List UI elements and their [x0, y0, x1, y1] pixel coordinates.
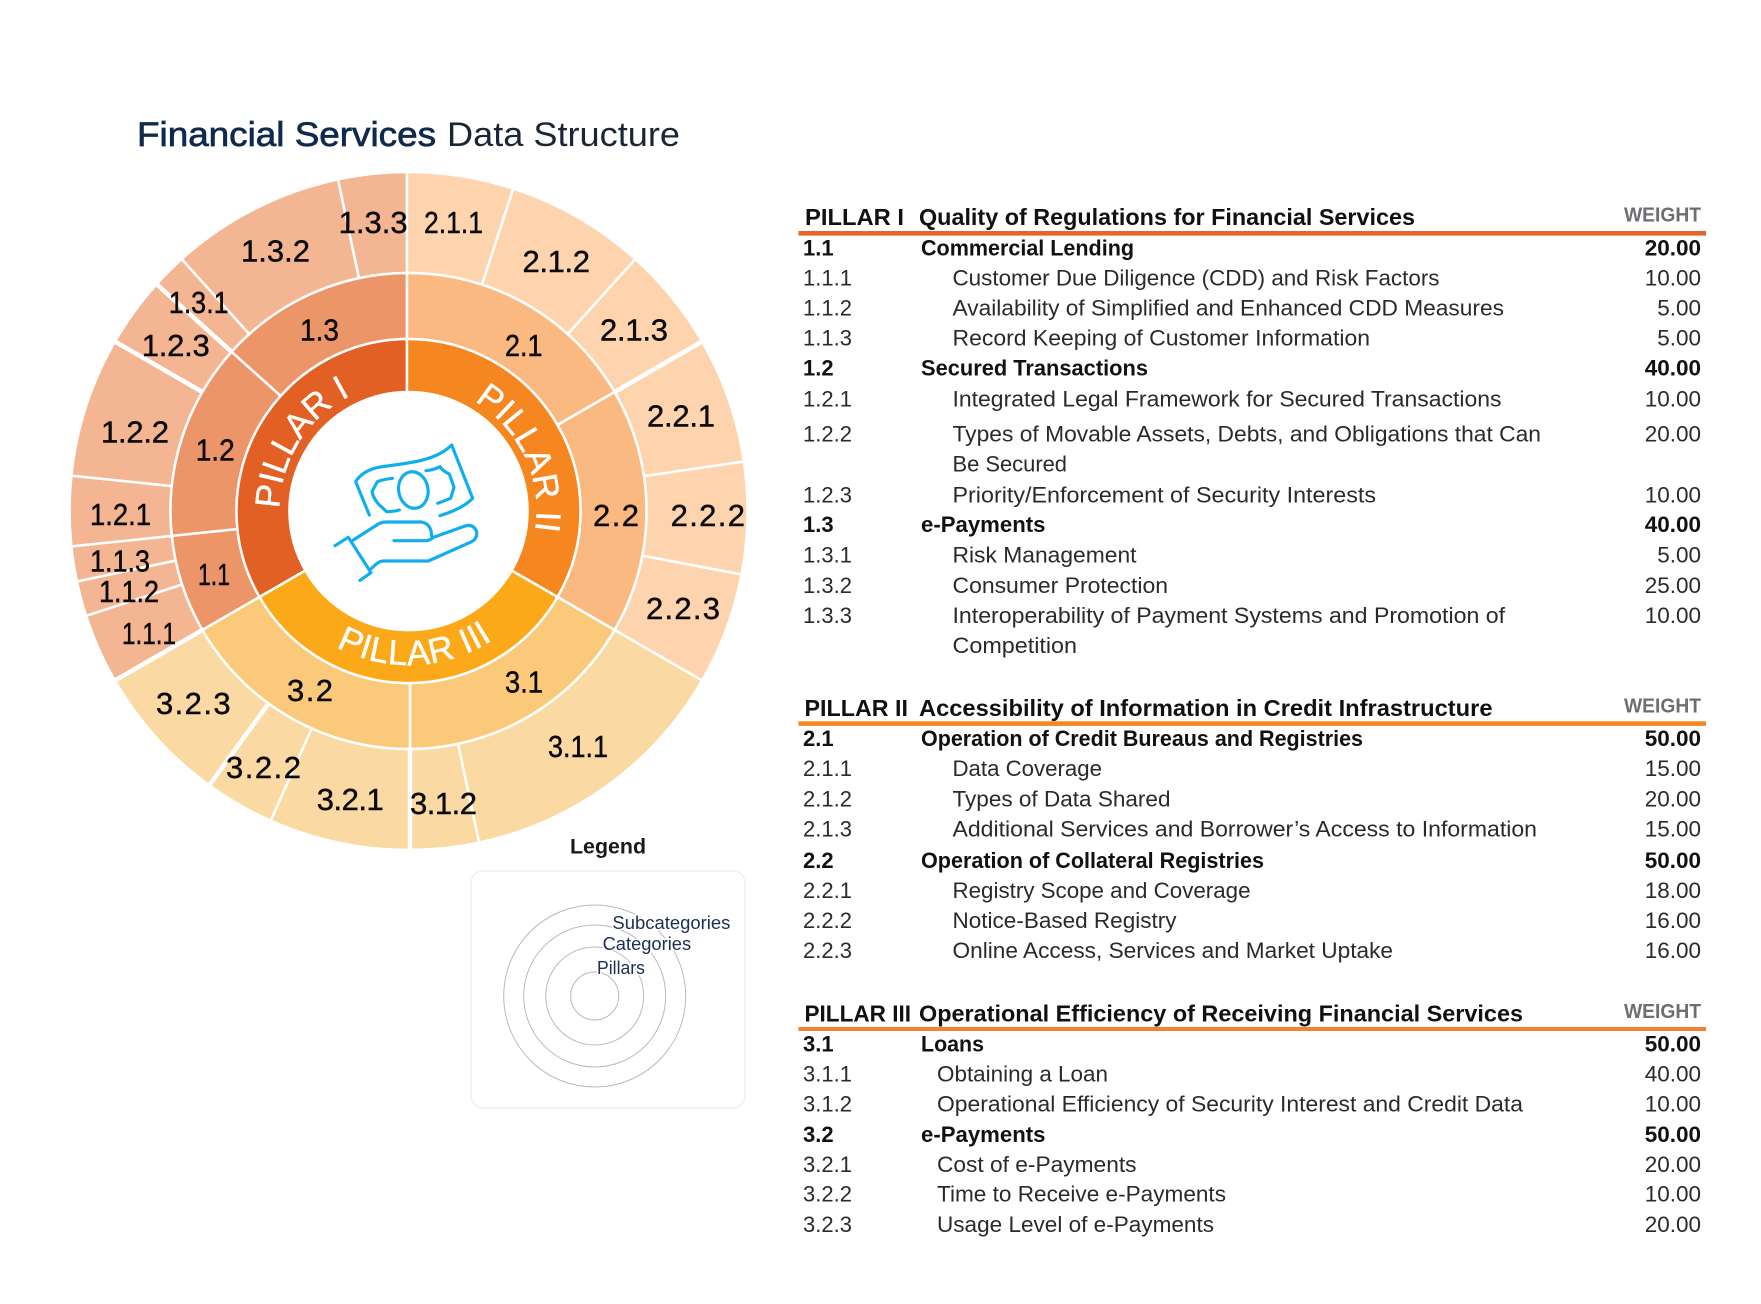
row 2.1.1: Data Coverage — [952, 756, 1102, 781]
segment 2.2.3 — [615, 556, 742, 680]
segment pillar II — [407, 339, 581, 597]
ring: subcategories — [70, 172, 748, 850]
row 2.2.1: 2.2.1 — [803, 878, 852, 903]
row 1.1.2: Availability of Simplified and Enhanced CDD Measures — [952, 296, 1504, 321]
segment 1.3.3 — [338, 172, 407, 278]
row 2.1 — [803, 726, 1701, 751]
row 1.3.3 — [803, 603, 1701, 658]
row 1.2.2: Types of Movable Assets, Debts, and Obligations that Can — [952, 422, 1541, 447]
row 2.2.2: 16.00 — [1645, 908, 1701, 933]
row 2.2: Operation of Collateral Registries — [921, 848, 1264, 873]
row 2.2.3 — [803, 938, 1701, 963]
segment 1.2.1 — [70, 476, 172, 546]
row 1.3.3: 10.00 — [1645, 603, 1701, 628]
row 1.3.2: Consumer Protection — [952, 573, 1168, 598]
title: Data Structure — [447, 116, 680, 154]
row 2.1.2 — [803, 787, 1701, 812]
row 2.2.2 — [803, 908, 1701, 933]
label 1.1.1: 1.1.1 — [122, 616, 176, 651]
row 3.2 — [803, 1122, 1701, 1147]
label: PILLAR III: PILLAR III — [338, 620, 490, 666]
row 2.1.3: 15.00 — [1645, 817, 1701, 842]
row 3.2: 3.2 — [803, 1122, 834, 1147]
label 3.1.1: 3.1.1 — [548, 729, 608, 764]
label 1.1: 1.1 — [198, 557, 230, 592]
row 1.2: 40.00 — [1645, 356, 1701, 381]
row 1.2.2: Be Secured — [952, 452, 1067, 477]
row 1.3.1 — [803, 543, 1701, 568]
row 1.3: 1.3 — [803, 512, 834, 537]
row 3.1: 50.00 — [1645, 1032, 1701, 1057]
row 3.2.3: Usage Level of e-Payments — [937, 1212, 1214, 1237]
row 1.1.3 — [803, 326, 1701, 351]
table: pillar II — [798, 695, 1706, 963]
row 3.2.1: 20.00 — [1645, 1152, 1701, 1177]
row 3.1.2 — [803, 1092, 1701, 1117]
segment 1.1.2 — [77, 560, 182, 616]
heading: pillar I: PILLAR I — [805, 204, 904, 230]
row 1.1 — [803, 236, 1701, 261]
row 2.1: Operation of Credit Bureaus and Registries — [921, 726, 1363, 751]
row 1.1.2: 1.1.2 — [803, 296, 852, 321]
label 3.2.2: 3.2.2 — [226, 750, 301, 785]
row 2.2.3: Online Access, Services and Market Uptake — [952, 938, 1393, 963]
row 2.2: 50.00 — [1645, 848, 1701, 873]
row 3.2.1: 3.2.1 — [803, 1152, 852, 1177]
heading: pillar I — [798, 204, 1706, 236]
label: PILLAR II: PILLAR II — [476, 382, 561, 531]
row 3.1: 3.1 — [803, 1032, 834, 1057]
segment code labels — [90, 205, 745, 821]
row 1.3.3: 1.3.3 — [803, 603, 852, 628]
heading: pillar III — [798, 1001, 1706, 1031]
row 3.1.1: 40.00 — [1645, 1062, 1701, 1087]
row 2.1.2: Types of Data Shared — [952, 787, 1170, 812]
table: pillar III — [798, 1001, 1706, 1237]
row 1.1.2: 5.00 — [1657, 296, 1701, 321]
icon: hand holding banknote — [335, 445, 477, 580]
legend label: pillars: Pillars — [597, 958, 645, 978]
row 3.1: Loans — [921, 1032, 984, 1057]
row 1.1.1: 10.00 — [1645, 266, 1701, 291]
segment 1.2.2 — [71, 342, 202, 486]
legend concentric rings — [504, 905, 686, 1087]
row 3.2.1 — [803, 1152, 1701, 1177]
heading: pillar III: PILLAR III — [804, 1001, 911, 1027]
row 1.2.1 — [803, 387, 1701, 412]
row 2.2 — [803, 848, 1701, 873]
row 2.2.1 — [803, 878, 1701, 903]
row 3.1.1 — [803, 1062, 1701, 1087]
label 1.1.2: 1.1.2 — [99, 574, 159, 609]
label 2.2.1: 2.2.1 — [647, 399, 715, 434]
label 1.3: 1.3 — [300, 313, 339, 348]
label 1.3.1: 1.3.1 — [169, 285, 229, 320]
row 3.2.2: 10.00 — [1645, 1182, 1701, 1207]
row 1.3.1: 1.3.1 — [803, 543, 852, 568]
heading: pillar I: Quality of Regulations for Financial Services — [919, 204, 1415, 230]
heading: pillar II: Accessibility of Information in Credit Infrastructure — [919, 695, 1492, 721]
row 2.1.3: 2.1.3 — [803, 817, 852, 842]
heading: pillar III: WEIGHT — [1624, 1001, 1701, 1023]
segment 3.2 — [202, 597, 410, 749]
row 2.2.2: 2.2.2 — [803, 908, 852, 933]
label 2.1.1: 2.1.1 — [424, 205, 483, 240]
row 2.1: 2.1 — [803, 726, 834, 751]
label 3.1: 3.1 — [505, 665, 543, 700]
row 1.2 — [803, 356, 1701, 381]
row 3.2.3: 3.2.3 — [803, 1212, 852, 1237]
row 1.3: e-Payments — [921, 512, 1046, 537]
row 1.2.3: 10.00 — [1645, 482, 1701, 507]
heading: pillar III: Operational Efficiency of Receiving Financial Services — [919, 1001, 1523, 1027]
segment 1.3 — [232, 273, 407, 396]
heading: pillar II: PILLAR II — [804, 695, 908, 721]
label 1.3.2: 1.3.2 — [241, 234, 310, 269]
label: PILLAR I: PILLAR I — [255, 376, 348, 506]
label 2.1.3: 2.1.3 — [600, 313, 668, 348]
segment pillar III — [260, 570, 558, 683]
row 1.3.2: 25.00 — [1645, 573, 1701, 598]
row 1.2.2 — [803, 422, 1701, 477]
row 1.1.2 — [803, 296, 1701, 321]
label 1.2.3: 1.2.3 — [142, 328, 210, 363]
row 1.1: 20.00 — [1645, 236, 1701, 261]
legend — [471, 836, 745, 1108]
row 2.1.2: 20.00 — [1645, 787, 1701, 812]
row 1.3.1: Risk Management — [952, 543, 1136, 568]
legend title: Legend — [570, 836, 646, 858]
row 2.1.1: 2.1.1 — [803, 756, 852, 781]
row 1.3: 40.00 — [1645, 512, 1701, 537]
row 2.1.3 — [803, 817, 1701, 842]
segment 2.2.1 — [615, 342, 744, 476]
segment 1.1.3 — [71, 536, 176, 582]
heading: pillar I: WEIGHT — [1624, 205, 1701, 227]
row 1.2.1: 1.2.1 — [803, 387, 852, 412]
row 2.2.2: Notice-Based Registry — [952, 908, 1176, 933]
label 2.2.3: 2.2.3 — [646, 591, 720, 626]
row 3.2.2: Time to Receive e-Payments — [937, 1182, 1226, 1207]
label 2.1: 2.1 — [505, 328, 542, 363]
label 1.1.3: 1.1.3 — [90, 544, 150, 578]
ring: categories — [170, 273, 646, 749]
label 1.3.3: 1.3.3 — [339, 205, 408, 240]
row 2.1.1: 15.00 — [1645, 756, 1701, 781]
row 2.1.2: 2.1.2 — [803, 787, 852, 812]
row 1.3.3: Interoperability of Payment Systems and Promotion of — [952, 603, 1506, 628]
segment 1.1.1 — [86, 584, 202, 680]
label 1.2.2: 1.2.2 — [101, 415, 169, 450]
label 3.2.1: 3.2.1 — [317, 782, 384, 817]
heading: pillar II — [798, 695, 1706, 726]
row 1.3.1: 5.00 — [1657, 543, 1701, 568]
row 1.2.2: 20.00 — [1645, 422, 1701, 447]
label 3.2: 3.2 — [287, 673, 333, 708]
sunburst chart — [70, 173, 746, 849]
segment 2.1.1 — [407, 172, 513, 285]
segment 2.2 — [558, 392, 646, 630]
row 3.2.3: 20.00 — [1645, 1212, 1701, 1237]
label 2.2.2: 2.2.2 — [671, 498, 745, 533]
row 3.2.2 — [803, 1182, 1701, 1207]
row 1.3.2 — [803, 573, 1701, 598]
row 1.2.3: Priority/Enforcement of Security Interests — [952, 482, 1376, 507]
row 1.1.1: Customer Due Diligence (CDD) and Risk Factors — [952, 266, 1440, 291]
row 3.2: e-Payments — [921, 1122, 1046, 1147]
row 1.1: Commercial Lending — [921, 236, 1134, 261]
row 1.2.3 — [803, 482, 1701, 507]
segment 3.1.1 — [458, 630, 702, 843]
row 3.2.3 — [803, 1212, 1701, 1237]
row 1.1: 1.1 — [803, 236, 834, 261]
row 2.2.3: 2.2.3 — [803, 938, 852, 963]
row 1.1.3: Record Keeping of Customer Information — [952, 326, 1370, 351]
label 1.2.1: 1.2.1 — [90, 497, 151, 532]
heading: pillar II: WEIGHT — [1624, 696, 1701, 718]
segment 3.2.1 — [271, 728, 410, 850]
row 3.1.1: Obtaining a Loan — [937, 1062, 1108, 1087]
label 2.1.2: 2.1.2 — [522, 244, 590, 279]
pillar labels — [255, 376, 561, 666]
table: pillar I — [798, 204, 1706, 658]
segment 1.1 — [172, 529, 260, 630]
title — [137, 116, 680, 154]
segment 3.1 — [410, 597, 615, 749]
row 3.1 — [803, 1032, 1701, 1057]
row 2.2: 2.2 — [803, 848, 834, 873]
row 1.2: Secured Transactions — [921, 356, 1148, 381]
segment 3.2.2 — [209, 704, 312, 821]
row 1.3 — [803, 512, 1701, 537]
row 1.3.2: 1.3.2 — [803, 573, 852, 598]
segment 1.2 — [170, 352, 281, 536]
segment 2.2.2 — [642, 462, 748, 574]
row 2.2.3: 16.00 — [1645, 938, 1701, 963]
row 1.3.3: Competition — [952, 633, 1077, 658]
legend box — [471, 871, 745, 1108]
ring: pillars — [236, 339, 581, 683]
row 2.2.1: Registry Scope and Coverage — [952, 878, 1250, 903]
label 3.2.3: 3.2.3 — [156, 686, 231, 721]
segment 2.1.2 — [482, 189, 635, 334]
row 1.1.3: 5.00 — [1657, 326, 1701, 351]
row 2.1.1 — [803, 756, 1701, 781]
row 3.1.2: Operational Efficiency of Security Interest and Credit Data — [937, 1092, 1524, 1117]
segment 1.2.3 — [115, 284, 232, 392]
row 1.2.1: 10.00 — [1645, 387, 1701, 412]
row 2.1: 50.00 — [1645, 726, 1701, 751]
label 3.1.2: 3.1.2 — [410, 786, 477, 821]
segment pillar I — [236, 339, 407, 597]
row 1.1.1 — [803, 266, 1701, 291]
row 1.2: 1.2 — [803, 356, 834, 381]
segment 1.3.2 — [182, 179, 359, 334]
segment 2.1.3 — [568, 259, 702, 392]
segment 3.2.3 — [115, 630, 269, 785]
segment 1.3.1 — [157, 259, 249, 352]
row 1.2.1: Integrated Legal Framework for Secured Transactions — [952, 387, 1502, 412]
row 1.1.3: 1.1.3 — [803, 326, 852, 351]
row 1.1.1: 1.1.1 — [803, 266, 852, 291]
segment 3.1.2 — [410, 744, 479, 850]
row 3.2.2: 3.2.2 — [803, 1182, 852, 1207]
row 2.1.3: Additional Services and Borrower’s Access to Information — [952, 817, 1537, 842]
label 1.2: 1.2 — [196, 433, 235, 468]
row 3.2: 50.00 — [1645, 1122, 1701, 1147]
row 3.1.1: 3.1.1 — [803, 1062, 852, 1087]
segment 2.1 — [407, 273, 615, 425]
row 3.1.2: 10.00 — [1645, 1092, 1701, 1117]
legend label: subcategories: Subcategories — [612, 913, 730, 933]
label 2.2: 2.2 — [593, 498, 639, 533]
row 1.2.3: 1.2.3 — [803, 482, 852, 507]
legend label: categories: Categories — [603, 934, 691, 954]
row 2.2.1: 18.00 — [1645, 878, 1701, 903]
row 1.2.2: 1.2.2 — [803, 422, 852, 447]
title: Financial Services — [137, 116, 436, 154]
row 3.1.2: 3.1.2 — [803, 1092, 852, 1117]
row 3.2.1: Cost of e-Payments — [937, 1152, 1136, 1177]
